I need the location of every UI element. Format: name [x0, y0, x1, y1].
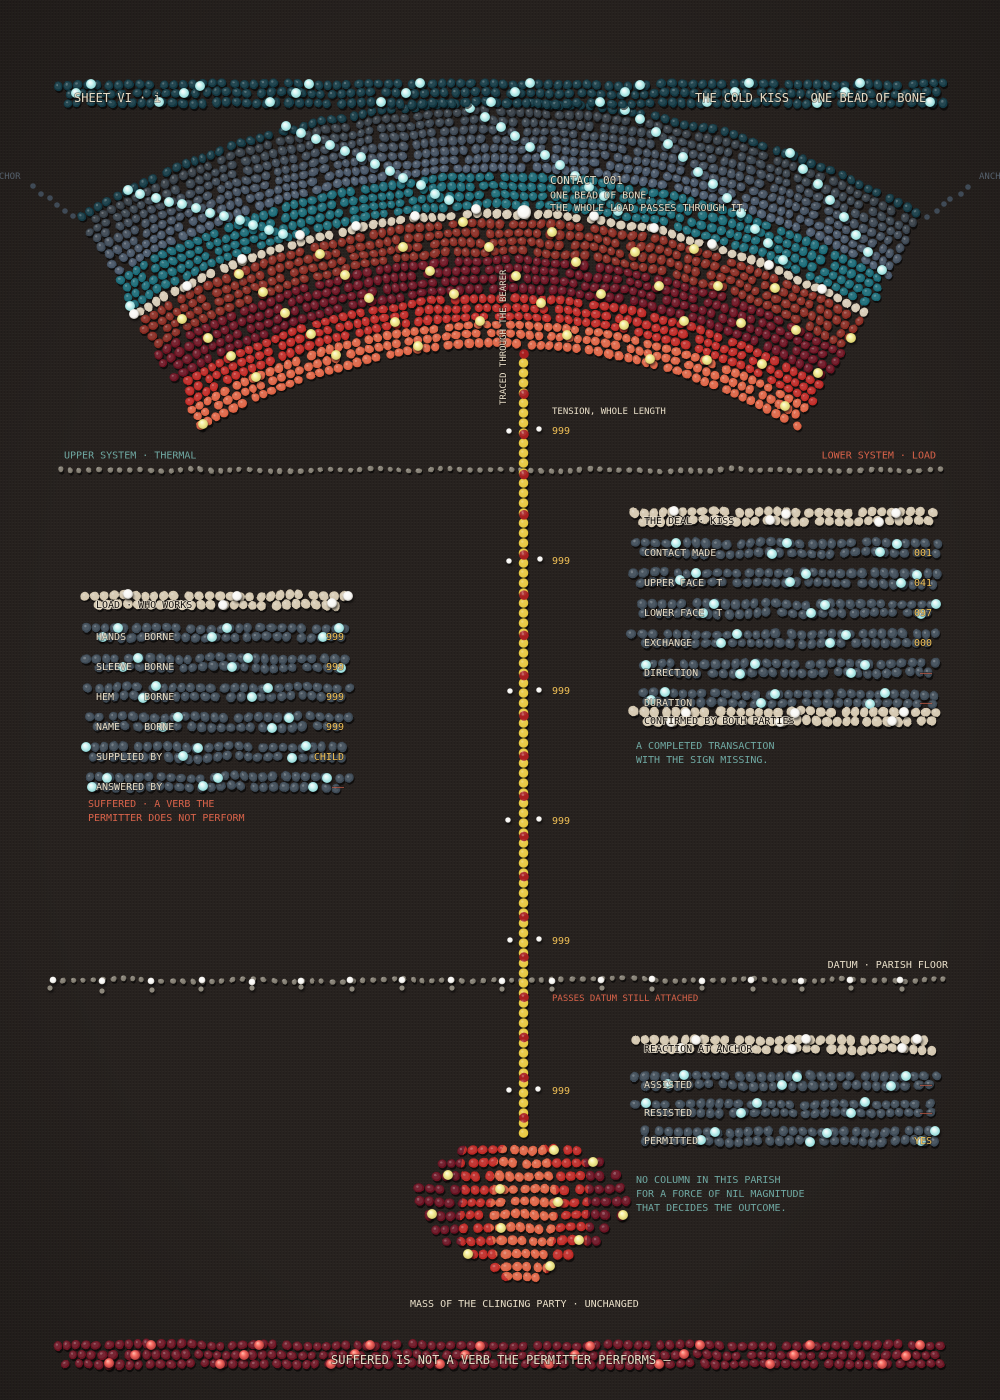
reaction table rows: ASSISTED [644, 1080, 692, 1091]
kiss table rows: DIRECTION [644, 668, 698, 679]
header right text: THE COLD KISS · ONE BEAD OF BONE [695, 91, 926, 105]
right anchor beads [924, 184, 971, 220]
outcome note: NO COLUMN IN THIS PARISH [636, 1175, 780, 1186]
kiss heading text: THE DEAL · KISS [644, 516, 734, 527]
kiss row beads [631, 542, 941, 705]
reaction table rows: YES [914, 1136, 932, 1147]
fan highlights: cyan beads [123, 103, 887, 311]
suffered note: SUFFERED · A VERB THE [88, 799, 214, 810]
transaction note: A COMPLETED TRANSACTION [636, 741, 774, 752]
clinging mass of beads [417, 1145, 630, 1279]
load heading text: LOAD · WHO WORKS [96, 600, 192, 611]
reaction table rows: PERMITTED [644, 1136, 698, 1147]
datum passes note: PASSES DATUM STILL ATTACHED [552, 994, 698, 1004]
outcome note: FOR A FORCE OF NIL MAGNITUDE [636, 1189, 805, 1200]
confirmed heading text: CONFIRMED BY BOTH PARTIES [644, 716, 795, 727]
footer text: SUFFERED IS NOT A VERB THE PERMITTER PERFORMS — [331, 1353, 671, 1367]
kiss table rows: —— [920, 698, 933, 709]
reaction heading beads [634, 1039, 937, 1051]
kiss table rows [644, 548, 933, 709]
load row beads [84, 627, 353, 789]
fan of bead rows: thermal and load bands [76, 101, 924, 429]
load table rows: SLEEVE BORNE [96, 662, 174, 673]
load table rows: —— [332, 782, 345, 793]
kiss table rows: 001 [914, 548, 932, 559]
tension ticks with values: 999 [552, 936, 570, 947]
upper system label: UPPER SYSTEM · THERMAL [64, 450, 196, 462]
load table rows: 999 [326, 662, 344, 673]
footer band [56, 1340, 946, 1369]
load table rows: NAME BORNE [96, 722, 174, 733]
reaction table rows: —— [920, 1108, 933, 1119]
contact callout [550, 174, 749, 214]
reaction row beads [633, 1075, 939, 1143]
contact callout: CONTACT 001 [550, 174, 623, 187]
upper system divider bead line [59, 469, 941, 472]
contact callout: ONE BEAD OF BONE. [550, 190, 652, 202]
kiss table rows: LOWER FACE T [644, 608, 722, 619]
fan highlights: yellow beads [177, 217, 856, 429]
tension ticks with values [505, 426, 570, 1097]
suffered note [88, 799, 245, 824]
transaction note [636, 741, 774, 766]
panel: reaction at anchor [633, 1034, 940, 1147]
kiss table rows: 041 [914, 578, 932, 589]
kiss table rows: CONTACT MADE [644, 548, 716, 559]
reaction table rows: RESISTED [644, 1108, 692, 1119]
load table rows: ANSWERED BY [96, 782, 162, 793]
kiss table rows: —— [920, 668, 933, 679]
kiss table rows: EXCHANGE [644, 638, 692, 649]
load table rows: 999 [326, 692, 344, 703]
reaction table rows: —— [920, 1080, 933, 1091]
reaction table rows [644, 1080, 933, 1147]
lower system label: LOWER SYSTEM · LOAD [822, 450, 936, 462]
tension ticks with values: 999 [552, 816, 570, 827]
panel: the deal, kiss [631, 506, 941, 727]
tension label: TENSION, WHOLE LENGTH [552, 407, 666, 417]
contact callout: THE WHOLE LOAD PASSES THROUGH IT. [550, 203, 749, 214]
datum label: DATUM · PARISH FLOOR [828, 960, 949, 971]
load table rows: HEM BORNE [96, 692, 174, 703]
kiss table rows: 000 [914, 638, 932, 649]
header band [57, 78, 946, 108]
datum bead line [47, 976, 946, 994]
load table rows: HANDS BORNE [96, 632, 174, 643]
outcome note: THAT DECIDES THE OUTCOME. [636, 1203, 787, 1214]
reaction heading text: REACTION AT ANCHOR [644, 1044, 753, 1055]
kiss heading beads [632, 511, 939, 523]
kiss table rows: UPPER FACE T [644, 578, 722, 589]
kiss table rows: 097 [914, 608, 932, 619]
panel: load, who works [81, 589, 353, 793]
outcome note [636, 1175, 805, 1214]
fan highlights: white beads on the contact row [129, 204, 827, 319]
tension ticks with values: 999 [552, 1086, 570, 1097]
suffered note: PERMITTER DOES NOT PERFORM [88, 813, 245, 824]
load table rows: 999 [326, 722, 344, 733]
left anchor beads [30, 183, 76, 219]
confirmed heading beads [632, 711, 939, 723]
tension ticks with values: 999 [552, 426, 570, 437]
load table rows: CHILD [314, 752, 344, 763]
mass caption: MASS OF THE CLINGING PARTY · UNCHANGED [410, 1299, 639, 1310]
load table rows: SUPPLIED BY [96, 752, 162, 763]
tension ticks with values: 999 [552, 556, 570, 567]
header left text: SHEET VI · i [74, 91, 161, 105]
tension ticks with values: 999 [552, 686, 570, 697]
load table rows: 999 [326, 632, 344, 643]
vertical chain label: TRACED THROUGH THE BEARER [499, 269, 509, 405]
central load chain [522, 353, 524, 1142]
kiss table rows: DURATION [644, 698, 692, 709]
load table rows [96, 632, 345, 793]
transaction note: WITH THE SIGN MISSING. [636, 755, 768, 766]
load heading beads [84, 595, 351, 607]
